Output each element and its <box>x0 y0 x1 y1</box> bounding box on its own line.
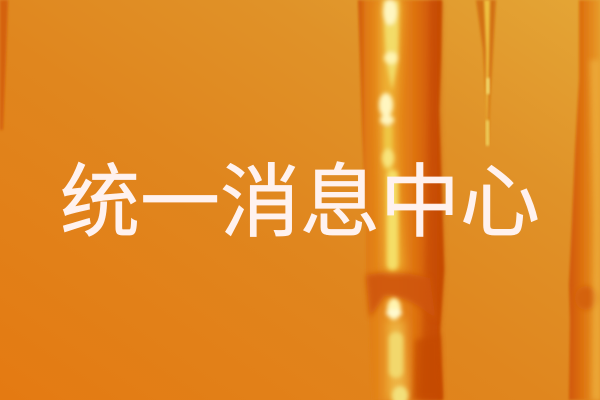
glowing highlights <box>379 0 408 400</box>
hanging thin stem <box>476 0 496 148</box>
glow halo <box>380 0 403 270</box>
title: 统一消息中心 <box>60 158 540 247</box>
main stem <box>358 0 444 400</box>
right stem <box>569 0 600 400</box>
left edge stem <box>0 0 8 130</box>
